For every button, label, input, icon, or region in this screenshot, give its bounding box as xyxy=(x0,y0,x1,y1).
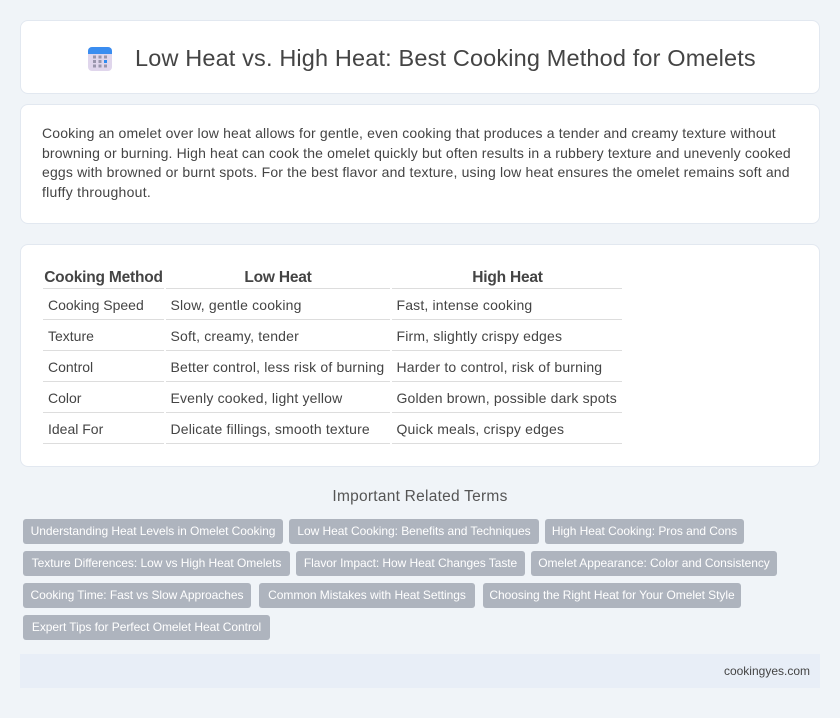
intro paragraph xyxy=(42,125,791,200)
comparison table: Ideal For xyxy=(48,421,103,437)
related terms tags: Texture Differences: Low vs High Heat Omelets xyxy=(32,556,281,570)
comparison table: Fast, intense cooking xyxy=(396,297,532,313)
comparison table: Better control, less risk of burning xyxy=(170,359,384,375)
related terms tags: Common Mistakes with Heat Settings xyxy=(268,588,466,602)
table header row xyxy=(44,269,543,286)
comparison table: Quick meals, crispy edges xyxy=(396,421,564,437)
table header row: High Heat xyxy=(472,269,543,286)
related terms tags: Expert Tips for Perfect Omelet Heat Control xyxy=(32,620,261,634)
footer source: cookingyes.com xyxy=(724,664,810,678)
comparison table panel xyxy=(20,244,820,467)
intro paragraph: Cooking an omelet over low heat allows for gentle, even cooking that produces a tender and creamy texture without xyxy=(42,125,776,141)
header panel xyxy=(20,20,820,94)
intro text panel xyxy=(20,104,820,224)
comparison table: Delicate fillings, smooth texture xyxy=(170,421,370,437)
related terms tags: Cooking Time: Fast vs Slow Approaches xyxy=(31,588,243,602)
comparison table: Harder to control, risk of burning xyxy=(396,359,602,375)
table header row: Low Heat xyxy=(244,269,312,286)
related terms heading: Important Related Terms xyxy=(332,488,508,505)
footer bar xyxy=(20,654,820,688)
comparison table: Soft, creamy, tender xyxy=(170,328,299,344)
comparison table xyxy=(43,269,622,444)
icon: calendar xyxy=(88,47,112,71)
related terms tags xyxy=(23,519,777,640)
related terms tags: High Heat Cooking: Pros and Cons xyxy=(552,524,737,538)
title: Low Heat vs. High Heat: Best Cooking Method for Omelets xyxy=(135,45,756,71)
table header row: Cooking Method xyxy=(44,269,163,286)
comparison table: Slow, gentle cooking xyxy=(170,297,302,313)
related terms tags: Choosing the Right Heat for Your Omelet Style xyxy=(489,588,735,602)
comparison table: Golden brown, possible dark spots xyxy=(396,390,617,406)
comparison table: Color xyxy=(48,390,81,406)
comparison table: Firm, slightly crispy edges xyxy=(396,328,562,344)
comparison table: Texture xyxy=(48,328,94,344)
comparison table: Cooking Speed xyxy=(48,297,144,313)
comparison table: Evenly cooked, light yellow xyxy=(170,390,342,406)
related terms tags: Low Heat Cooking: Benefits and Techniques xyxy=(297,524,531,538)
intro paragraph: eggs with browned or burnt spots. For the best flavor and texture, using low heat ensures the omelet remains soft and xyxy=(42,164,790,180)
comparison table: Control xyxy=(48,359,93,375)
related terms tags: Understanding Heat Levels in Omelet Cooking xyxy=(31,524,275,538)
intro paragraph: fluffy throughout. xyxy=(42,184,151,200)
intro paragraph: browning or burning. High heat can cook the omelet quickly but often results in a rubbery texture and unevenly cooked xyxy=(42,145,791,161)
related terms tags: Flavor Impact: How Heat Changes Taste xyxy=(304,556,517,570)
related terms tags: Omelet Appearance: Color and Consistency xyxy=(538,556,770,570)
